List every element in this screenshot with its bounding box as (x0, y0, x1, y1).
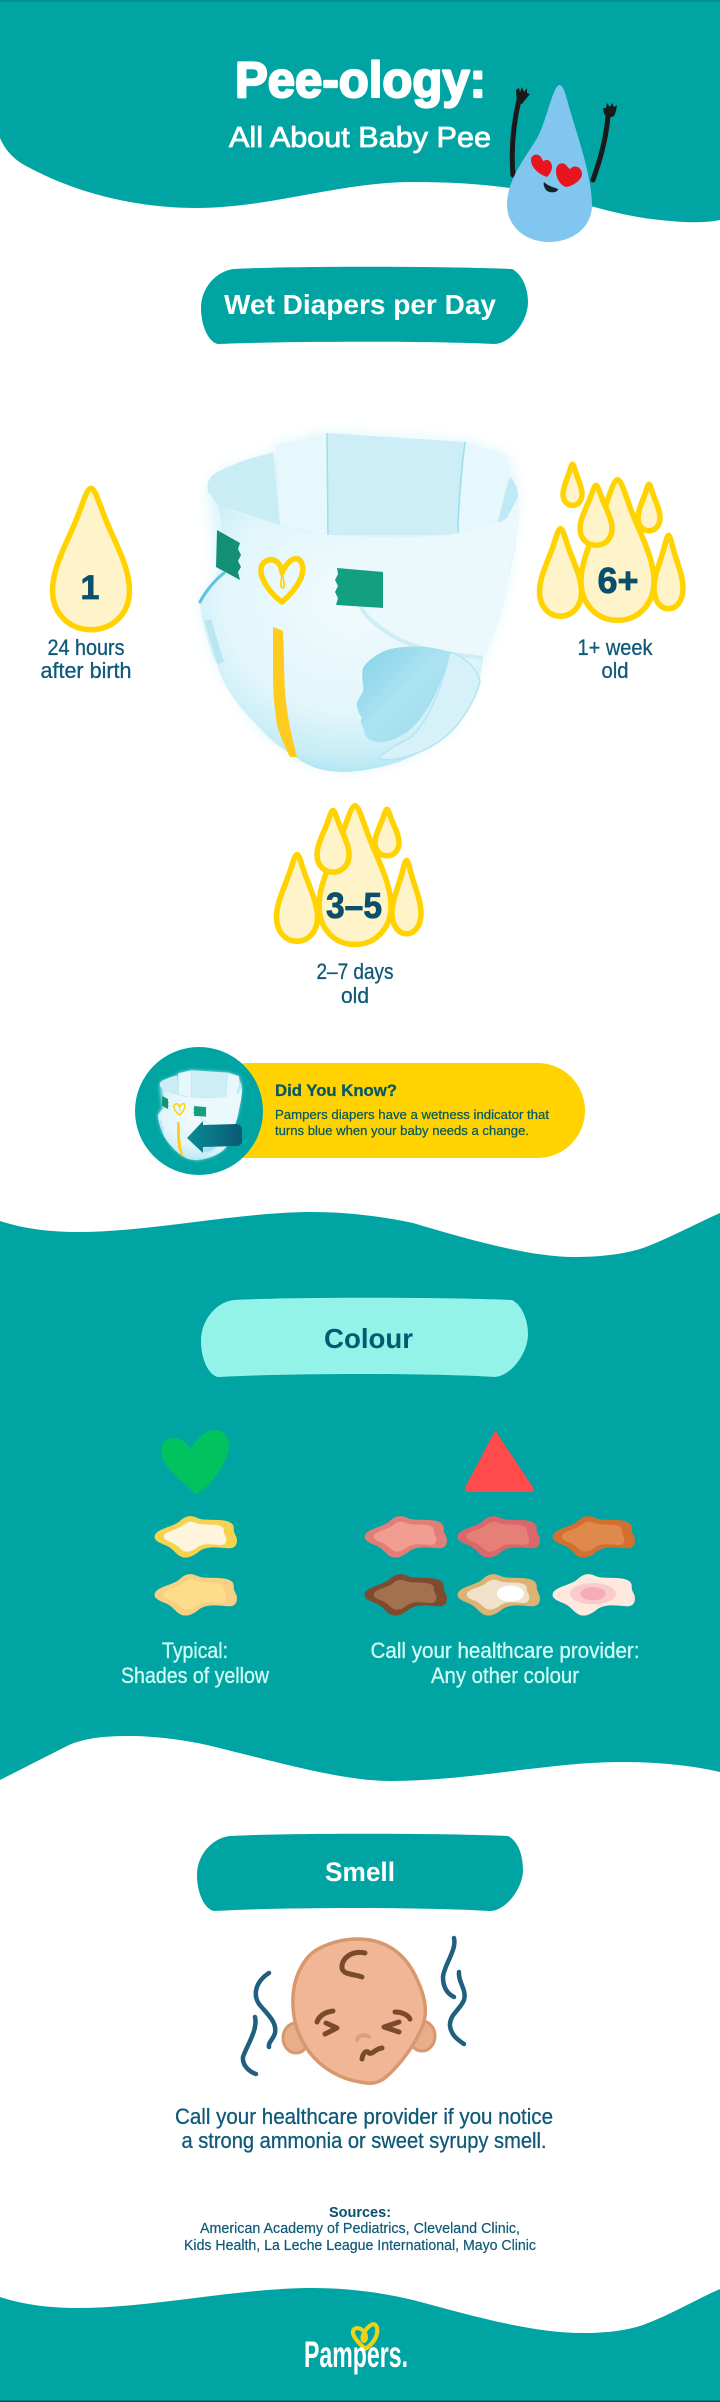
number: 6+ (597, 560, 639, 601)
footer wave (0, 2288, 720, 2402)
big drop (581, 480, 654, 620)
pill: wet diapers heading (201, 267, 528, 344)
panel: other colours (365, 1433, 640, 1688)
mouth (362, 2048, 382, 2059)
stat: 3-5 wet diapers (276, 806, 421, 1008)
splat: dark yellow (155, 1574, 237, 1616)
caption: Any other colour (431, 1663, 579, 1688)
left drop (540, 528, 582, 616)
right arm (593, 116, 608, 180)
panel: colour band (0, 1212, 720, 1781)
splat: pale yellow (155, 1516, 237, 1558)
callout heading: Did You Know? (275, 1081, 397, 1100)
logo heart (353, 2324, 377, 2349)
teal circle (135, 1047, 263, 1175)
header wave (0, 0, 720, 222)
left arm (512, 100, 519, 175)
stat: 6+ wet diapers (540, 464, 683, 683)
hair curl (342, 1952, 365, 1977)
callout: did you know (135, 1047, 585, 1175)
top right drop (375, 809, 399, 856)
left brow (317, 2011, 333, 2022)
right drop (654, 535, 683, 609)
odour squiggle (443, 1938, 454, 1997)
heart eye right (556, 163, 582, 187)
caption: 2–7 days (316, 959, 394, 984)
sources heading: Sources: (329, 2205, 391, 2221)
top centre drop (580, 485, 612, 545)
sources list: Kids Health, La Leche League International, Mayo Clinic (184, 2238, 536, 2254)
callout body: turns blue when your baby needs a change. (275, 1123, 529, 1138)
top right drop (638, 484, 660, 531)
icon: green heart (161, 1430, 229, 1494)
nose (357, 2035, 369, 2040)
splat: orange (553, 1516, 635, 1558)
odour squiggle (450, 1972, 465, 2044)
right hand (603, 103, 617, 118)
splat: tan and white (458, 1574, 540, 1616)
left ear (283, 2023, 309, 2053)
caption: Call your healthcare provider: (370, 1638, 640, 1663)
arrow (187, 1121, 242, 1153)
illustration: diaper (200, 433, 518, 772)
mouth (544, 182, 558, 192)
caption: Shades of yellow (121, 1663, 269, 1688)
number: 1 (81, 569, 99, 607)
drop (52, 488, 130, 630)
heart eye left (531, 155, 552, 177)
caption: 24 hours (48, 635, 124, 660)
panel: typical colours (121, 1430, 269, 1688)
icon: water drop mascot (507, 85, 617, 242)
right ear (409, 2021, 435, 2051)
top left drop (317, 810, 349, 872)
pill: smell heading (197, 1834, 523, 1911)
left eye (325, 2023, 337, 2034)
big drop (319, 806, 391, 944)
odour squiggle (256, 1973, 275, 2047)
left hand (516, 87, 530, 104)
pill: colour heading (201, 1298, 528, 1377)
text: sources (184, 2205, 536, 2254)
callout body: Pampers diapers have a wetness indicator that (275, 1107, 549, 1122)
pill label: Wet Diapers per Day (224, 289, 496, 320)
text: smell advice: a strong ammonia or sweet syrupy smell. (182, 2128, 546, 2153)
right drop (392, 860, 421, 934)
pill label: Colour (324, 1323, 413, 1354)
splat: white with red (553, 1574, 635, 1616)
splat: light pink (365, 1516, 447, 1558)
splat: brown (365, 1574, 447, 1616)
caption: after birth (40, 658, 132, 683)
left drop (276, 854, 318, 941)
caption: 1+ week (578, 635, 653, 660)
heading: Pee-ology: Pee-ology: (235, 52, 486, 108)
subheading: All About Baby Pee (229, 122, 491, 154)
text: smell advice: Call your healthcare provider if you notice (175, 2104, 553, 2129)
yellow bar (200, 1063, 585, 1158)
stat: 1 wet diaper (40, 488, 132, 683)
sources list: American Academy of Pediatrics, Cleveland Clinic, (200, 2221, 520, 2237)
right brow (395, 2012, 410, 2019)
caption: Typical: (162, 1638, 228, 1663)
mini diaper (158, 1070, 242, 1160)
title (229, 52, 491, 154)
splat: pink (458, 1516, 540, 1558)
pill label: Smell (325, 1857, 395, 1887)
logo wordmark: Pampers. (304, 2334, 408, 2375)
logo: Pampers (304, 2324, 408, 2375)
illustration: baby face (243, 1938, 465, 2083)
number: 3–5 (326, 885, 382, 926)
small drop (563, 464, 582, 505)
icon: red warning triangle (466, 1433, 533, 1491)
right eye (384, 2022, 399, 2032)
drop body (507, 85, 592, 242)
caption: old (341, 983, 369, 1008)
head (293, 1939, 425, 2083)
caption: old (602, 658, 628, 683)
odour squiggle (243, 2017, 256, 2074)
